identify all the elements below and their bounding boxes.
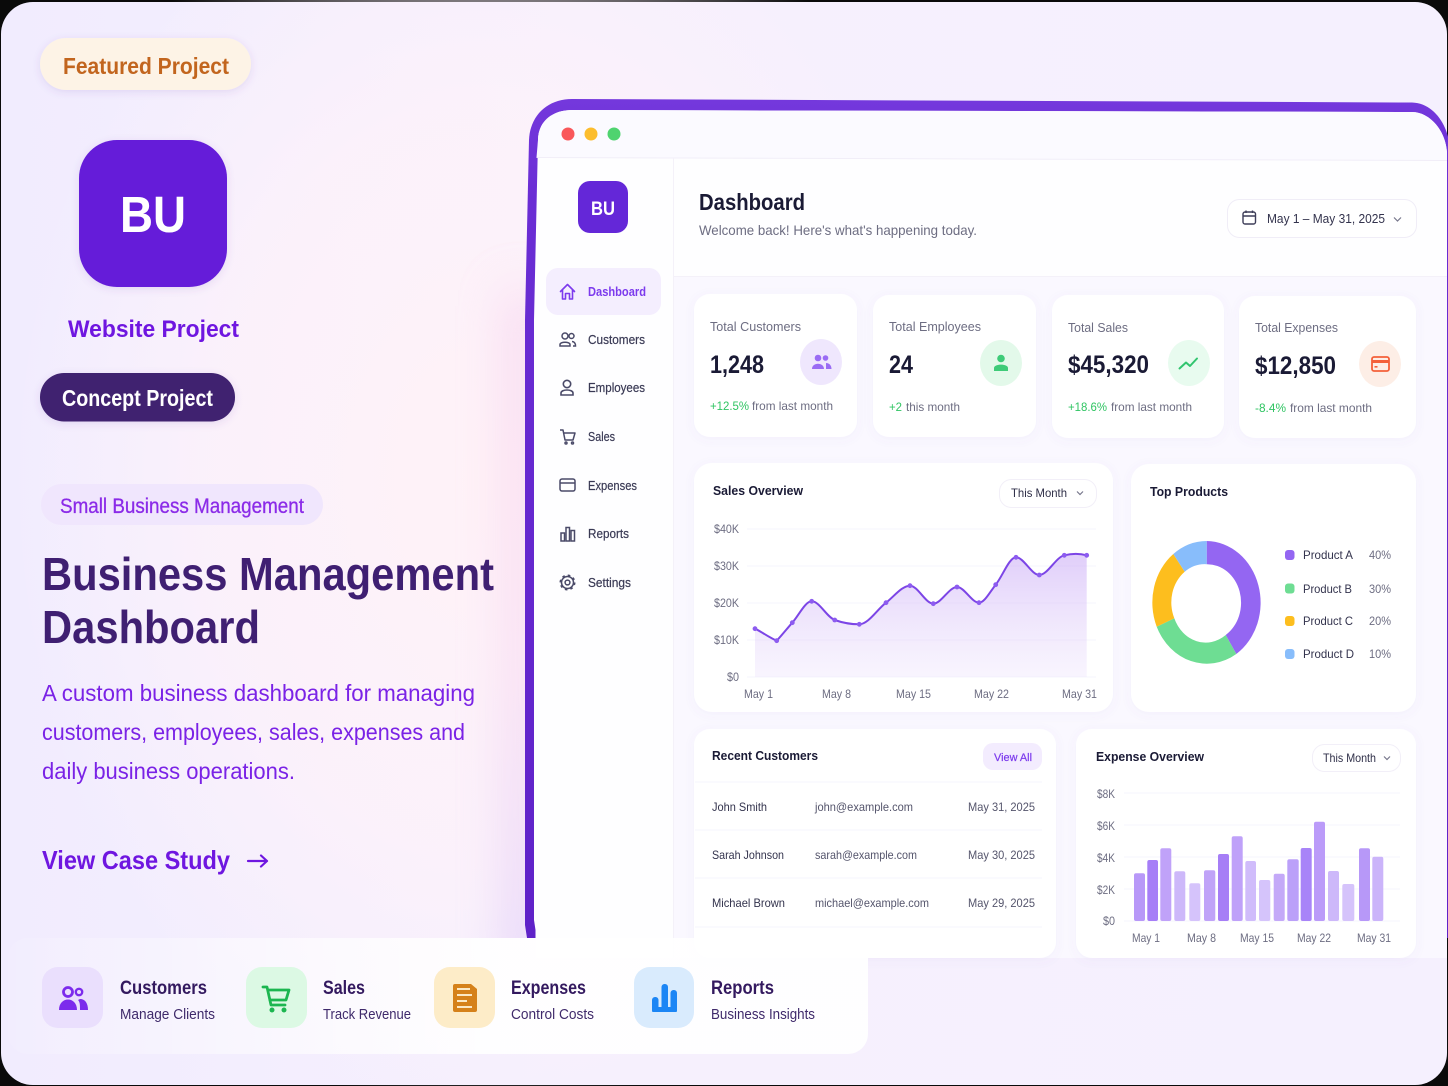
nav: sales xyxy=(560,429,615,444)
legend: Product D xyxy=(1303,647,1354,661)
feature: reports: Reports xyxy=(711,978,774,999)
panel: recent customers: john@example.com xyxy=(814,800,913,814)
stat card: total customers: Total Customers xyxy=(710,319,801,334)
badge: concept project xyxy=(40,373,235,422)
legend: Product C xyxy=(1303,614,1353,628)
stat card: total expenses: $12,850 xyxy=(1255,352,1336,380)
dashboard header xyxy=(699,189,1416,238)
nav: employees: Employees xyxy=(588,380,645,395)
badge: concept project: Concept Project xyxy=(62,385,213,411)
stat card: total expenses: Total Expenses xyxy=(1255,320,1338,335)
donut chart xyxy=(1152,541,1261,664)
dashboard header: Welcome back! Here's what's happening today. xyxy=(699,222,977,238)
feature: expenses xyxy=(434,967,594,1028)
main title: Dashboard xyxy=(42,601,260,653)
stat card: total sales: $45,320 xyxy=(1068,351,1149,379)
bar chart: expenses: $0 xyxy=(1103,916,1115,928)
stat card: total customers: 1,248 xyxy=(710,351,764,379)
nav: employees xyxy=(561,380,645,395)
dashboard header: Dashboard xyxy=(699,189,805,215)
line chart: sales: $0 xyxy=(727,672,739,684)
dropdown: this month xyxy=(1000,480,1096,508)
nav: settings xyxy=(560,575,631,590)
line chart: sales: May 15 xyxy=(896,687,931,701)
stat card: total customers: +12.5% xyxy=(710,399,749,413)
feature: customers xyxy=(42,967,215,1028)
line chart: sales: $40K xyxy=(714,524,739,536)
panel: top products xyxy=(1131,464,1416,712)
feature: expenses: Control Costs xyxy=(511,1006,594,1023)
panel: recent customers: Sarah Johnson xyxy=(712,848,784,862)
line chart: sales: May 31 xyxy=(1062,687,1097,701)
panel: sales overview: Sales Overview xyxy=(713,483,804,498)
sidebar logo xyxy=(578,181,628,233)
bar chart: expenses: May 22 xyxy=(1297,931,1331,945)
panel: recent customers: michael@example.com xyxy=(815,896,929,910)
bar chart: expenses: $8K xyxy=(1097,789,1115,801)
description: daily business operations. xyxy=(42,758,295,784)
feature: reports: Business Insights xyxy=(711,1006,815,1023)
nav: customers: Customers xyxy=(588,332,645,347)
nav: sales: Sales xyxy=(588,429,615,444)
feature: customers: Customers xyxy=(120,978,207,999)
stat card: total sales: Total Sales xyxy=(1068,320,1128,335)
line chart: sales: $30K xyxy=(714,561,739,573)
stat card: total expenses: -8.4% xyxy=(1255,401,1286,415)
stat card: total employees xyxy=(873,295,1036,437)
nav: settings: Settings xyxy=(588,575,631,590)
bar chart: expenses: May 8 xyxy=(1187,931,1216,945)
feature: sales xyxy=(246,967,411,1028)
dropdown: this month xyxy=(1312,744,1400,772)
bar chart: expenses: May 31 xyxy=(1357,931,1391,945)
legend: Product A xyxy=(1303,548,1353,562)
panel: recent customers: May 31, 2025 xyxy=(968,800,1035,814)
panel: top products: Top Products xyxy=(1150,484,1228,499)
main title: Business Management xyxy=(42,548,494,600)
nav: reports xyxy=(561,526,629,541)
line chart: sales: May 8 xyxy=(822,687,851,701)
view all button xyxy=(983,743,1042,770)
dropdown: this month: This Month xyxy=(1323,751,1376,765)
dashboard window xyxy=(525,99,1448,958)
line chart: sales: $20K xyxy=(714,598,739,610)
bar chart: expenses: May 15 xyxy=(1240,931,1274,945)
legend: 40% xyxy=(1369,548,1391,562)
description: customers, employees, sales, expenses and xyxy=(42,719,465,745)
dropdown: this month: This Month xyxy=(1011,486,1067,500)
view all button: View All xyxy=(994,752,1032,764)
line chart: sales xyxy=(714,524,1097,701)
panel: recent customers: John Smith xyxy=(712,800,767,814)
feature: sales: Track Revenue xyxy=(323,1006,411,1023)
legend: Product B xyxy=(1303,582,1352,596)
bar chart: expenses: $6K xyxy=(1097,821,1115,833)
legend: 10% xyxy=(1369,647,1391,661)
line chart: sales: May 1 xyxy=(744,687,773,701)
stat card: total customers xyxy=(694,294,857,437)
panel: expense overview: Expense Overview xyxy=(1096,749,1205,764)
logo tile xyxy=(79,140,227,287)
line chart: sales: $10K xyxy=(714,635,739,647)
panel: recent customers: May 30, 2025 xyxy=(968,848,1035,862)
feature: sales: Sales xyxy=(323,978,365,999)
feature: reports xyxy=(634,967,815,1028)
feature strip xyxy=(8,938,868,1054)
description: A custom business dashboard for managing xyxy=(42,680,475,706)
stat card: total customers: from last month xyxy=(752,399,833,413)
stat card: total employees: +2 xyxy=(889,400,902,414)
icon: arrow xyxy=(248,856,267,866)
sidebar xyxy=(546,181,661,590)
nav: reports: Reports xyxy=(588,526,629,541)
stat card: total expenses: from last month xyxy=(1290,401,1372,415)
panel: sales overview xyxy=(694,463,1113,712)
sidebar logo: BU xyxy=(591,199,615,220)
stat card: total employees: Total Employees xyxy=(889,319,981,334)
panel: recent customers: Michael Brown xyxy=(712,896,785,910)
stat card: total sales: from last month xyxy=(1111,400,1192,414)
panel: recent customers: Recent Customers xyxy=(712,748,818,763)
legend xyxy=(1285,548,1391,661)
date picker xyxy=(1228,200,1416,238)
stat card: total employees: 24 xyxy=(889,351,913,379)
line chart: sales: May 22 xyxy=(974,687,1009,701)
feature: customers: Manage Clients xyxy=(120,1006,215,1023)
panel: recent customers: May 29, 2025 xyxy=(968,896,1035,910)
stat card: total sales: +18.6% xyxy=(1068,400,1107,414)
bar chart: expenses: $4K xyxy=(1097,853,1115,865)
panel: recent customers: sarah@example.com xyxy=(815,848,917,862)
panel: recent customers xyxy=(694,729,1056,958)
nav: expenses: Expenses xyxy=(588,478,637,493)
feature: expenses: Expenses xyxy=(511,978,586,999)
badge: featured project xyxy=(40,38,251,90)
date picker: May 1 – May 31, 2025 xyxy=(1267,211,1385,226)
website project label: Website Project xyxy=(68,316,239,343)
main title xyxy=(42,548,494,653)
stat card: total sales xyxy=(1052,295,1224,438)
nav: customers xyxy=(560,332,645,347)
legend: 20% xyxy=(1369,614,1391,628)
bar chart: expenses: $2K xyxy=(1097,885,1115,897)
nav: dashboard xyxy=(546,268,661,315)
bar chart: expenses: May 1 xyxy=(1132,931,1160,945)
nav: expenses xyxy=(560,478,637,493)
bar chart: expenses xyxy=(1097,789,1400,945)
category tag xyxy=(41,484,323,525)
stat card: total expenses xyxy=(1239,296,1416,438)
stat card: total employees: this month xyxy=(906,400,960,414)
panel: expense overview xyxy=(1076,729,1416,958)
description xyxy=(42,680,475,784)
window title bar xyxy=(536,110,1447,160)
logo tile: BU xyxy=(120,186,186,243)
badge: featured project: Featured Project xyxy=(63,53,229,79)
nav: dashboard: Dashboard xyxy=(588,284,646,299)
legend: 30% xyxy=(1369,582,1391,596)
category tag: Small Business Management xyxy=(60,495,304,518)
call to action: View Case Study xyxy=(42,845,230,875)
